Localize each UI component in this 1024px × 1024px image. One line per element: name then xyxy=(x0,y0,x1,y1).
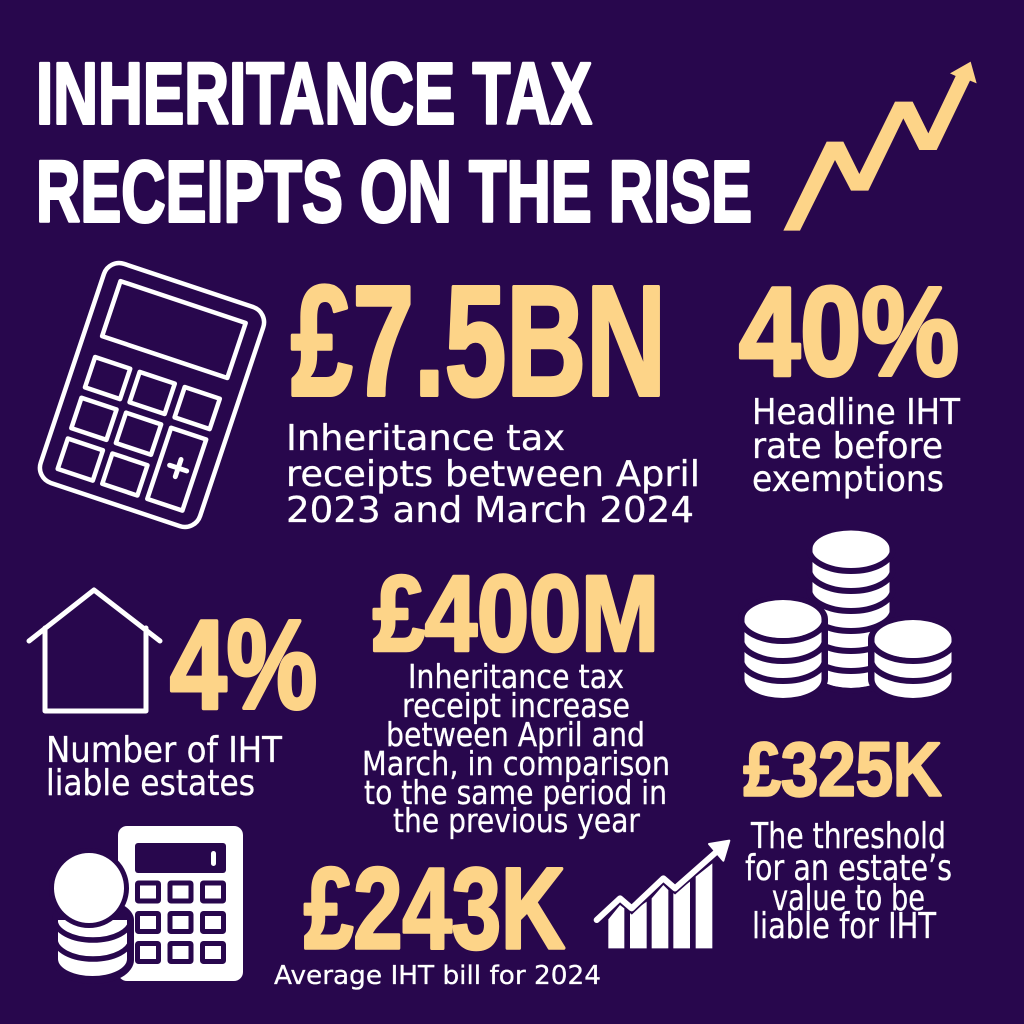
stat: 325 thousand: £325K xyxy=(744,728,942,812)
stat: 40 percent: 40% xyxy=(739,261,959,402)
icon: house outline xyxy=(29,590,160,711)
text: liable estates: liable estates xyxy=(46,763,255,804)
icon: calculator and coins xyxy=(49,826,243,984)
text: inheritance tax receipts xyxy=(286,418,700,531)
title: RECEIPTS ON THE RISE xyxy=(36,144,752,240)
text: receipt increase: between April and xyxy=(386,715,645,754)
text: receipt increase: to the same period in xyxy=(364,773,667,812)
text: liable estates xyxy=(46,730,283,804)
text: headline rate xyxy=(752,392,961,500)
icon: rising arrow xyxy=(783,62,977,231)
title xyxy=(36,46,752,240)
text: headline rate: exemptions xyxy=(752,459,944,500)
text: receipt increase: receipt increase xyxy=(402,686,630,725)
text: threshold: value to be xyxy=(772,878,925,919)
stat: 243 thousand: £243K xyxy=(304,845,565,973)
text: headline rate: rate before xyxy=(752,426,943,467)
text: threshold xyxy=(745,816,952,947)
text: threshold: The threshold xyxy=(750,816,946,857)
text: receipt increase: Inheritance tax xyxy=(408,657,624,696)
text: receipt increase: March, in comparison xyxy=(362,744,670,783)
text: liable estates: Number of IHT xyxy=(46,730,283,771)
text: inheritance tax receipts: Inheritance tax xyxy=(286,418,565,459)
stat: 7.5 billion: £7.5BN xyxy=(291,254,666,429)
text: receipt increase xyxy=(362,657,670,840)
text: threshold: for an estate’s xyxy=(745,848,952,889)
icon: calculator outline xyxy=(36,259,268,531)
text: inheritance tax receipts: receipts between April xyxy=(286,454,700,495)
text: inheritance tax receipts: 2023 and March 2024 xyxy=(286,490,694,531)
stat: 400 million: £400M xyxy=(373,552,659,674)
icon: coin stacks xyxy=(738,530,958,703)
icon: bar chart with arrow xyxy=(597,841,729,948)
text: receipt increase: the previous year xyxy=(393,801,640,840)
text: threshold: liable for IHT xyxy=(752,906,937,947)
title: INHERITANCE TAX xyxy=(36,46,592,142)
text: average bill: Average IHT bill for 2024 xyxy=(274,961,601,991)
text: headline rate: Headline IHT xyxy=(752,392,961,433)
stat: 4 percent: 4% xyxy=(170,594,317,735)
